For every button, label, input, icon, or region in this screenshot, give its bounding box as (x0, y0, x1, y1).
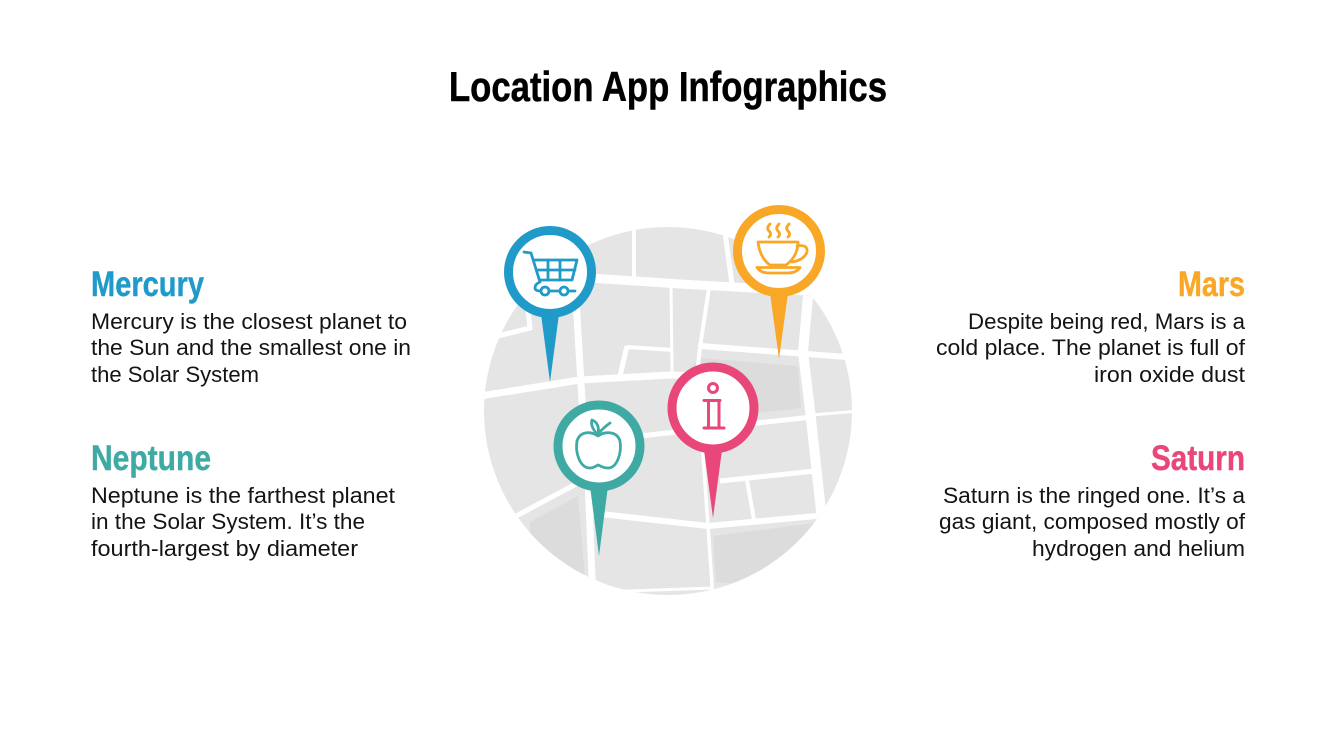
text: Neptune description: Neptune is the farthest planet (91, 483, 395, 508)
pin: apple (558, 405, 640, 556)
text: Mercury description: the Solar System (91, 362, 259, 387)
panel: Mercury (91, 265, 411, 387)
icon: apple (577, 420, 620, 468)
text: Saturn description: Saturn is the ringed one. It’s a (943, 483, 1246, 508)
text: Saturn description: hydrogen and helium (1032, 536, 1245, 561)
pin: coffee cup (738, 210, 820, 359)
text: Mercury description: the Sun and the smallest one in (91, 335, 411, 360)
icon: info (704, 384, 724, 428)
panel: Mercury: Mercury (91, 265, 204, 304)
panel: Neptune: Neptune (91, 439, 211, 478)
text: Mars description: iron oxide dust (1094, 362, 1245, 387)
panel: Saturn (939, 439, 1246, 561)
icon: cup (757, 224, 807, 273)
text: Saturn description: gas giant, composed mostly of (939, 509, 1246, 534)
text: Neptune description: fourth-largest by diameter (91, 536, 358, 561)
map circle (480, 220, 860, 605)
pin: shopping cart (508, 230, 592, 382)
panel: Mars: Mars (1178, 265, 1245, 304)
text: Mercury description (91, 309, 411, 387)
text: Saturn description (939, 483, 1246, 561)
title: Location App Infographics (449, 63, 887, 110)
icon: cart (524, 252, 577, 295)
text: Mercury description: Mercury is the closest planet to (91, 309, 407, 334)
text: Mars description: Despite being red, Mars is a (968, 309, 1246, 334)
text: Neptune description (91, 483, 395, 561)
panel: Mars (936, 265, 1246, 387)
panel: Saturn: Saturn (1151, 439, 1245, 478)
text: Mars description: cold place. The planet is full of (936, 335, 1246, 360)
text: Neptune description: in the Solar System. It’s the (91, 509, 365, 534)
pin: info (672, 367, 754, 518)
panel: Neptune (91, 439, 395, 561)
text: Mars description (936, 309, 1246, 387)
